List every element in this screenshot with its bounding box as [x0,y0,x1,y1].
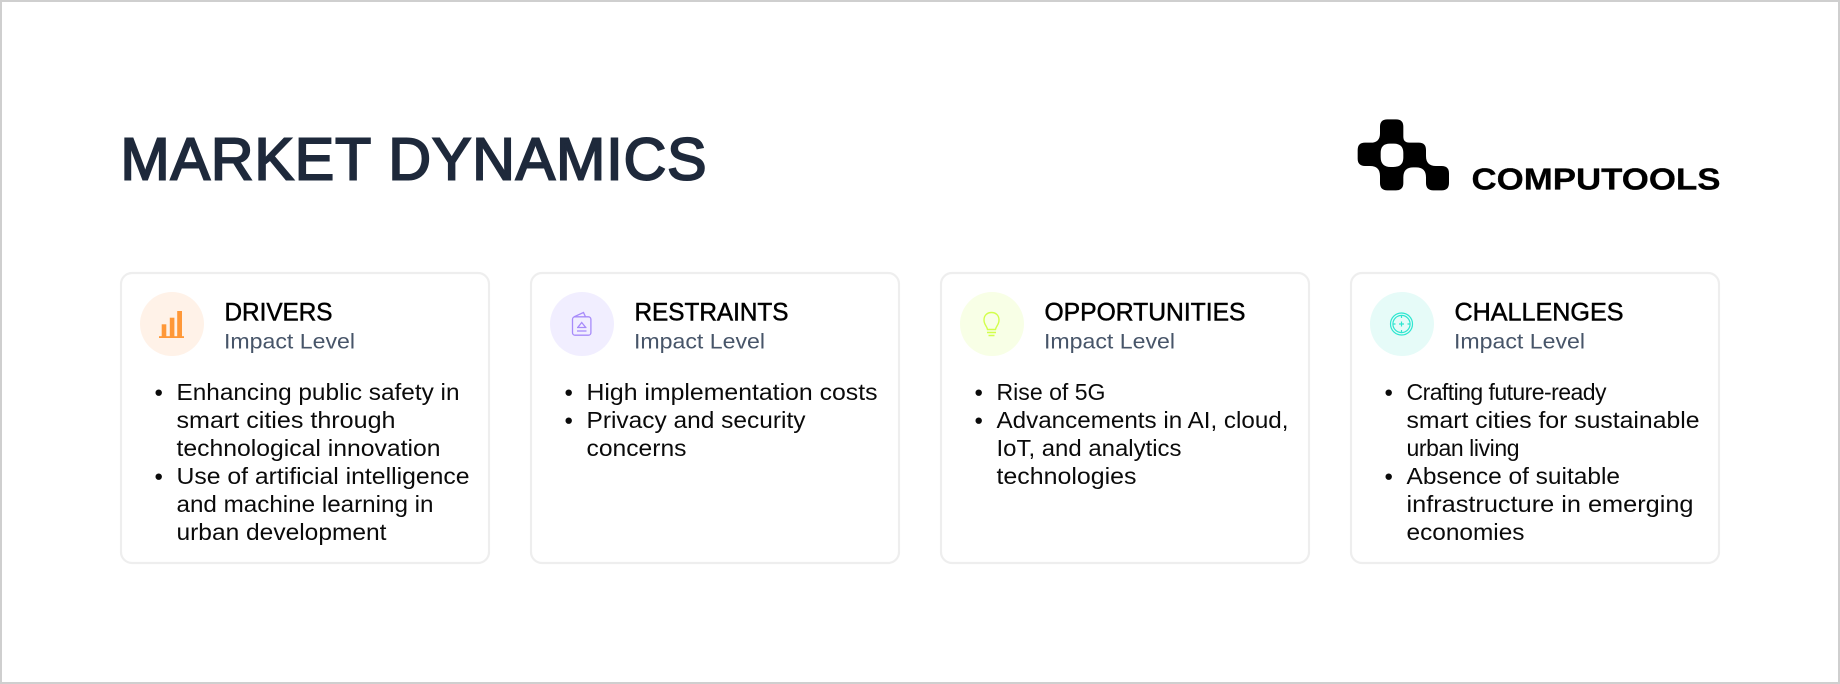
bullet list: drivers: and machine learning in [176,491,434,517]
icon: light bulb [960,292,1024,356]
bullet list: opportunities: Rise of 5G [996,379,1106,405]
bullet list: challenges: Crafting future-ready [1406,379,1607,405]
bullet list: drivers [156,379,470,545]
bullet list: restraints: Privacy and security [586,407,806,433]
subheading: Impact Level [1454,330,1585,354]
heading: opportunities: OPPORTUNITIES [1044,298,1246,326]
bullet list: restraints [566,379,878,461]
icon: target [1370,292,1434,356]
bullet list: drivers: Enhancing public safety in [176,379,460,405]
icon: document [550,292,614,356]
icon: bar chart [140,292,204,356]
bullet list: opportunities: technologies [996,463,1136,489]
heading: challenges: CHALLENGES [1454,298,1624,326]
bullet list: drivers: technological innovation [176,435,440,461]
bullet list: restraints: High implementation costs [586,379,878,405]
panel: challenges [1351,273,1719,563]
panel: opportunities [941,273,1309,563]
bullet list: drivers: urban development [176,519,387,545]
bullet list: challenges: smart cities for sustainable [1406,407,1700,433]
subheading: Impact Level [1044,330,1175,354]
bullet list: challenges: economies [1406,519,1524,545]
bullet list: opportunities: Advancements in AI, cloud, [996,407,1288,433]
heading: restraints: RESTRAINTS [634,298,788,326]
logo wordmark: COMPUTOOLS [1472,162,1720,196]
logo: Computools [1358,119,1720,196]
bullet list: opportunities: IoT, and analytics [996,435,1182,461]
bullet list: opportunities [976,379,1288,489]
panel: drivers [121,273,489,563]
bullet list: drivers: Use of artificial intelligence [176,463,470,489]
subheading: Impact Level [634,330,765,354]
panel: restraints [531,273,899,563]
bullet list: challenges [1386,379,1700,545]
bullet list: challenges: Absence of suitable [1406,463,1620,489]
heading: drivers: DRIVERS [224,298,332,326]
bullet list: drivers: smart cities through [176,407,396,433]
subheading: Impact Level [224,330,355,354]
icon: logo mark [1358,119,1449,190]
bullet list: restraints: concerns [586,435,686,461]
bullet list: challenges: infrastructure in emerging [1406,491,1694,517]
bullet list: challenges: urban living [1406,435,1520,461]
title: MARKET DYNAMICS [120,126,706,192]
